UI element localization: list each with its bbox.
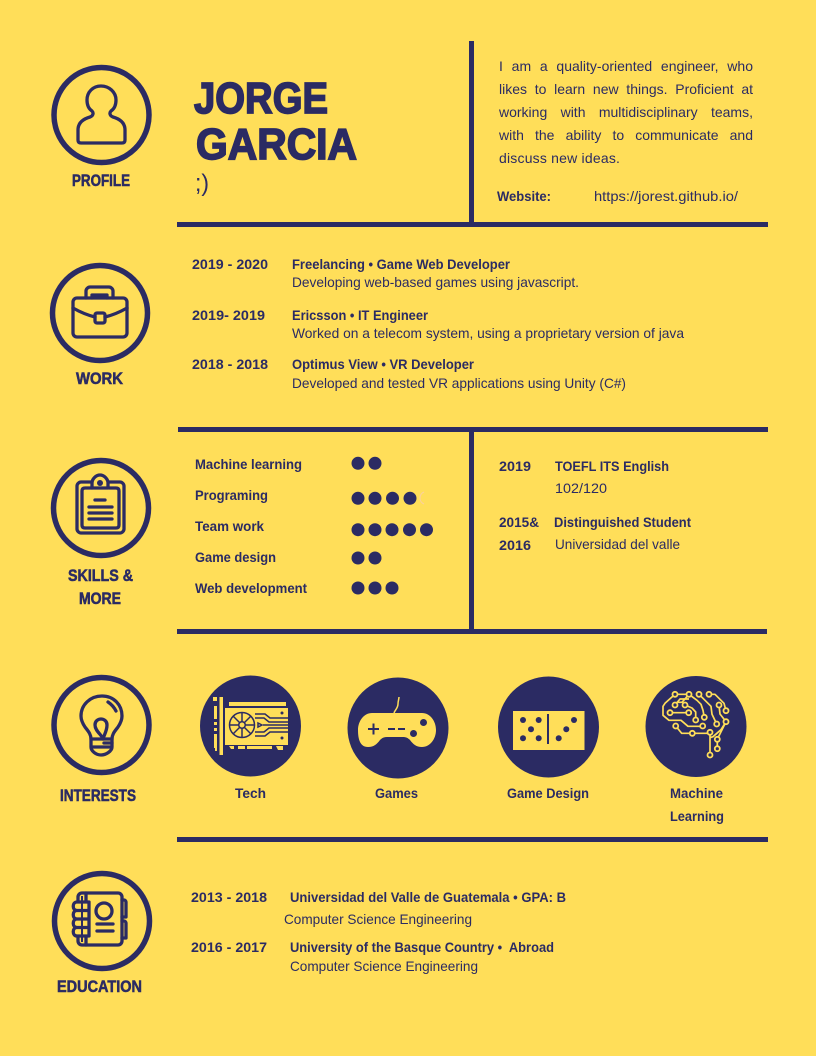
label: machine learning: Learning (670, 808, 724, 824)
icon: clipboard (54, 460, 148, 556)
panel: skills and more (54, 456, 691, 608)
entry: freelancing (192, 256, 579, 290)
heading: skills and more: SKILLS & (68, 567, 133, 585)
icon: circuit brain (646, 676, 746, 777)
icon: briefcase (52, 266, 148, 360)
award: toefl: 102/120 (555, 480, 607, 496)
label: machine learning (670, 785, 724, 824)
entry: ericsson (192, 307, 684, 341)
award: distinguished student: Universidad del valle (555, 536, 680, 552)
title: name: GARCIA (196, 120, 357, 169)
text block: website (497, 188, 738, 204)
award: distinguished student: 2016 (499, 537, 531, 553)
entry: ericsson: Ericsson • IT Engineer (292, 307, 428, 323)
text block: website: Website: (497, 188, 551, 204)
entry: optimus view (192, 356, 626, 391)
skill: web development: Web development (195, 580, 307, 596)
award: distinguished student: Distinguished Student (554, 514, 691, 530)
skill: programing (195, 487, 424, 505)
text block: summary: working with multidisciplinary teams, (499, 104, 753, 120)
title: name: JORGE (194, 74, 328, 123)
entry: basque country: 2016 - 2017 (191, 939, 267, 955)
heading: work: WORK (76, 370, 123, 388)
entry: freelancing: Developing web-based games using javascript. (292, 274, 579, 290)
entry: optimus view: 2018 - 2018 (192, 356, 268, 372)
text block: website: https://jorest.github.io/ (594, 188, 738, 204)
award: distinguished student (499, 514, 691, 553)
award: toefl: TOEFL ITS English (555, 458, 669, 474)
panel: interests (54, 676, 746, 824)
heading: skills and more (68, 567, 133, 608)
text block: summary: discuss new ideas. (499, 150, 620, 166)
heading: profile: PROFILE (72, 172, 130, 190)
entry: universidad del valle: Computer Science Engineering (284, 911, 472, 927)
panel: education (54, 874, 566, 996)
skill: web development (195, 580, 398, 596)
title: name (194, 74, 357, 169)
award: toefl (499, 458, 669, 496)
entry: freelancing: 2019 - 2020 (192, 256, 268, 272)
tagline: ;) (195, 170, 209, 197)
heading: interests: INTERESTS (60, 787, 136, 805)
entry: basque country: University of the Basque Country • Abroad (290, 939, 554, 955)
entry: freelancing: Freelancing • Game Web Developer (292, 256, 511, 272)
text block: summary: I am a quality-oriented engineer, who (499, 58, 753, 74)
entry: ericsson: Worked on a telecom system, using a proprietary version of java (292, 325, 684, 341)
icon: graphics card (200, 676, 301, 776)
heading: skills and more: MORE (79, 590, 121, 608)
text block: summary (499, 55, 755, 171)
icon: profile person (54, 68, 149, 162)
label: game design: Game Design (507, 785, 589, 801)
heading: education: EDUCATION (57, 978, 142, 996)
skill: machine learning: Machine learning (195, 456, 302, 472)
icon: game controller (348, 678, 448, 778)
entry: basque country (191, 939, 554, 974)
text block: summary: with the ability to communicate and (499, 127, 753, 143)
skill: game design: Game design (195, 549, 276, 565)
entry: universidad del valle: 2013 - 2018 (191, 889, 267, 905)
entry: universidad del valle: Universidad del Valle de Guatemala • GPA: B (290, 889, 566, 905)
icon: notebook (54, 874, 150, 968)
entry: ericsson: 2019- 2019 (192, 307, 265, 323)
label: tech: Tech (235, 785, 266, 801)
entry: optimus view: Optimus View • VR Developer (292, 356, 475, 372)
label: machine learning: Machine (670, 785, 723, 801)
skill: team work: Team work (195, 518, 264, 534)
skill: game design (195, 549, 382, 565)
panel: profile (54, 55, 755, 204)
entry: basque country: Computer Science Engineering (290, 958, 478, 974)
skill: programing: Programing (195, 487, 268, 503)
award: distinguished student: 2015& (499, 514, 539, 530)
label: games: Games (375, 785, 418, 801)
skill: team work (195, 518, 433, 536)
icon: light bulb (54, 678, 149, 772)
skill: machine learning (195, 456, 382, 472)
icon: domino (498, 676, 599, 778)
panel: work (52, 256, 684, 391)
award: toefl: 2019 (499, 458, 531, 474)
entry: optimus view: Developed and tested VR applications using Unity (C#) (292, 375, 626, 391)
entry: universidad del valle (191, 889, 566, 927)
text block: summary: likes to learn new things. Proficient at (499, 81, 753, 97)
